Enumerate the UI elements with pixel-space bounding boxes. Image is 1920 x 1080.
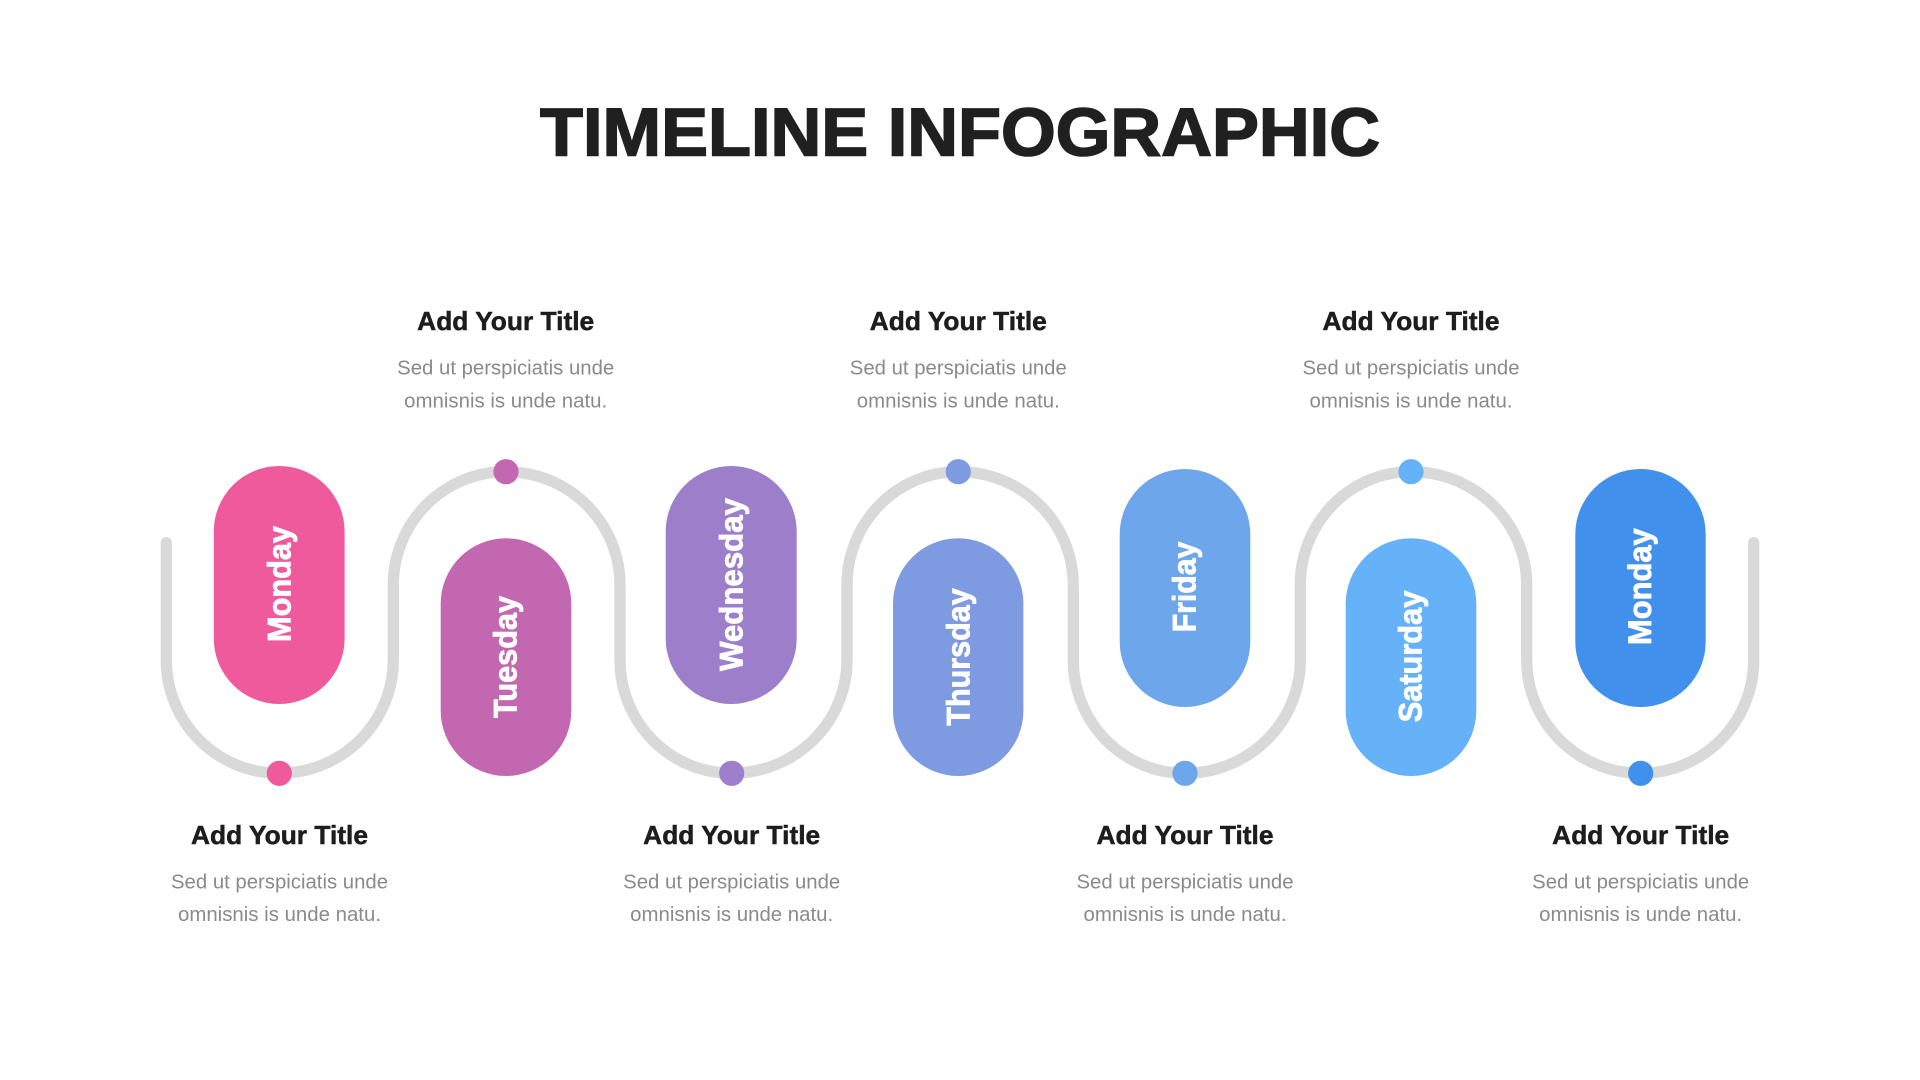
- marker dot: Tuesday: [493, 459, 519, 484]
- pill: Saturday: Saturday: [1393, 591, 1429, 722]
- text block: Thursday: Sed ut perspiciatis unde: [850, 357, 1067, 379]
- marker dot: Monday: [267, 761, 292, 786]
- text block: Monday: omnisnis is unde natu.: [178, 904, 381, 926]
- text block: Wednesday: omnisnis is unde natu.: [630, 904, 833, 926]
- text block: Saturday: Add Your Title: [1322, 306, 1500, 336]
- pill: Thursday: Thursday: [940, 588, 976, 726]
- text block: Friday: Sed ut perspiciatis unde: [1076, 871, 1294, 893]
- marker dot: Saturday: [1398, 459, 1424, 484]
- text block: Tuesday: Sed ut perspiciatis unde: [397, 357, 614, 379]
- text block: Tuesday: omnisnis is unde natu.: [404, 390, 607, 412]
- pill: Friday: [1120, 469, 1250, 707]
- pill: Wednesday: [666, 466, 797, 704]
- text block: Friday: [1076, 820, 1294, 926]
- pill: Monday (last): [1575, 469, 1706, 707]
- text block: Monday (last): [1532, 820, 1749, 926]
- marker dot: Wednesday: [719, 761, 744, 786]
- pill: Monday: [214, 466, 345, 704]
- text block: Thursday: Add Your Title: [870, 306, 1047, 336]
- text block: Monday (last): Add Your Title: [1552, 820, 1729, 850]
- pill: Saturday: [1346, 538, 1476, 776]
- text block: Tuesday: Add Your Title: [417, 306, 594, 336]
- pill: Friday: Friday: [1167, 542, 1203, 632]
- text block: Monday: Sed ut perspiciatis unde: [171, 871, 388, 893]
- title: TIMELINE INFOGRAPHIC: [540, 95, 1380, 171]
- marker dot: Friday: [1172, 761, 1198, 786]
- text block: Wednesday: Add Your Title: [643, 820, 820, 850]
- text block: Monday (last): omnisnis is unde natu.: [1539, 904, 1742, 926]
- text block: Saturday: omnisnis is unde natu.: [1310, 390, 1512, 412]
- winding timeline path: [166, 472, 1754, 773]
- marker dot: Monday (last): [1628, 761, 1653, 786]
- text block: Saturday: [1302, 306, 1520, 412]
- text block: Friday: omnisnis is unde natu.: [1084, 904, 1286, 926]
- pill: Wednesday: Wednesday: [713, 498, 749, 671]
- text block: Thursday: [850, 306, 1067, 412]
- pill: Monday: Monday: [262, 526, 298, 642]
- pill: Tuesday: [441, 538, 571, 776]
- text block: Tuesday: [397, 306, 614, 412]
- pill: Monday (last): Monday: [1622, 528, 1658, 645]
- pill: Thursday: [893, 538, 1023, 776]
- pill: Tuesday: Tuesday: [488, 596, 524, 718]
- text block: Monday: [171, 820, 388, 926]
- text block: Wednesday: Sed ut perspiciatis unde: [623, 871, 840, 893]
- marker dot: Thursday: [946, 459, 971, 484]
- text block: Friday: Add Your Title: [1096, 820, 1274, 850]
- text block: Thursday: omnisnis is unde natu.: [857, 390, 1060, 412]
- text block: Saturday: Sed ut perspiciatis unde: [1302, 357, 1520, 379]
- text block: Monday (last): Sed ut perspiciatis unde: [1532, 871, 1749, 893]
- text block: Monday: Add Your Title: [191, 820, 368, 850]
- text block: Wednesday: [623, 820, 840, 926]
